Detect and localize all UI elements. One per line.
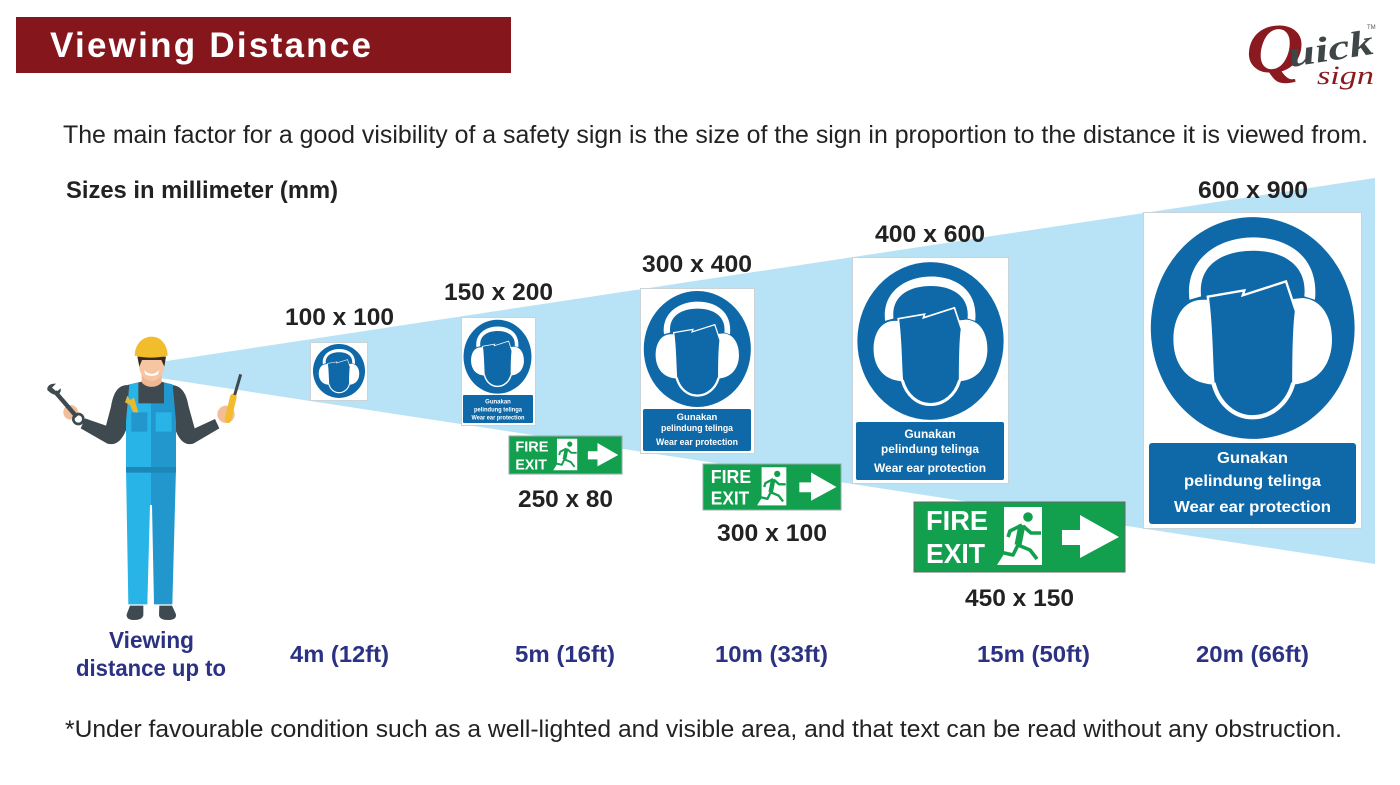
sign: fire exit 300 x 100: FIRE — [711, 466, 751, 487]
size labels: 450 x 150 — [965, 585, 1074, 612]
sign: fire exit 300 x 100: EXIT — [711, 488, 749, 509]
worker figure — [47, 337, 241, 620]
sign: ear protection 150 x 200: pelindung telinga — [474, 408, 523, 414]
size labels: 400 x 600 — [875, 221, 985, 248]
sign: fire exit 450 x 150: FIRE — [926, 505, 988, 536]
sign: ear protection 150 x 200 — [462, 318, 536, 426]
viewing distance labels: 10m (33ft) — [715, 641, 828, 667]
sign: ear protection 600 x 900: Gunakan — [1217, 450, 1288, 467]
sign: ear protection 300 x 400: pelindung telinga — [661, 423, 734, 434]
wrench and hand — [63, 405, 78, 420]
size labels: 250 x 80 — [518, 486, 613, 513]
sign: ear protection 600 x 900: pelindung telinga — [1184, 473, 1321, 490]
pocket spanner — [125, 396, 138, 412]
left arm — [81, 385, 128, 444]
viewing distance labels: Viewing — [109, 627, 194, 653]
intro text: The main factor for a good visibility of a safety sign is the size of the sign in proportion to the distance it is viewed from. — [63, 121, 1368, 149]
sign: ear protection 400 x 600 — [852, 258, 1008, 484]
size labels: 300 x 100 — [717, 520, 827, 547]
sign: fire exit 450 x 150 — [914, 502, 1125, 572]
sign: fire exit 300 x 100 — [703, 464, 841, 510]
screwdriver and hand — [217, 406, 235, 423]
sizes heading: Sizes in millimeter (mm) — [66, 177, 338, 204]
viewing distance labels: 5m (16ft) — [515, 641, 615, 667]
viewing distance labels: distance up to — [76, 655, 226, 681]
footnote: *Under favourable condition such as a well-lighted and visible area, and that text can be read without any obstruction. — [65, 716, 1342, 743]
size labels: 600 x 900 — [1198, 177, 1308, 204]
viewing distance labels: 4m (12ft) — [290, 641, 389, 667]
viewing distance labels: 15m (50ft) — [977, 641, 1090, 667]
viewing distance labels — [76, 627, 1309, 681]
size labels: 300 x 400 — [642, 251, 752, 278]
sign: ear protection 600 x 900: Wear ear protection — [1174, 499, 1331, 516]
sign: fire exit 250 x 80: EXIT — [515, 457, 548, 474]
size labels: 100 x 100 — [285, 304, 394, 331]
title banner: Viewing Distance — [50, 26, 371, 65]
logo: Quick sign: sign — [1317, 61, 1374, 90]
sign: ear protection 300 x 400: Gunakan — [677, 412, 718, 423]
sign: fire exit 250 x 80 — [509, 436, 622, 474]
sign: ear protection 150 x 200: Wear ear protection — [472, 416, 525, 422]
logo: Quick sign: Q — [1246, 10, 1304, 88]
sign: fire exit 450 x 150: EXIT — [926, 538, 985, 569]
logo: Quick sign: uick — [1285, 22, 1376, 75]
size labels — [285, 177, 1308, 612]
overalls — [126, 382, 151, 604]
sign: ear protection 400 x 600: Wear ear protection — [874, 461, 986, 475]
title banner — [16, 17, 511, 73]
size labels: 150 x 200 — [444, 279, 553, 306]
logo: Quick sign — [1246, 10, 1376, 90]
sign: ear protection 300 x 400 — [640, 288, 754, 454]
helmet — [135, 337, 168, 358]
sign: fire exit 250 x 80: FIRE — [515, 439, 548, 456]
right arm — [172, 385, 219, 444]
sign: ear protection 600 x 900 — [1144, 212, 1362, 528]
sign: ear protection 400 x 600: pelindung telinga — [881, 442, 979, 456]
boots — [127, 606, 143, 620]
sign: ear protection 300 x 400: Wear ear protection — [656, 437, 738, 448]
viewing distance labels: 20m (66ft) — [1196, 641, 1309, 667]
sign: ear protection 400 x 600: Gunakan — [904, 427, 956, 441]
torso — [125, 382, 173, 425]
sign: ear protection 100 x 100 — [310, 342, 368, 400]
sign: ear protection 150 x 200: Gunakan — [485, 400, 511, 406]
logo: Quick sign: TM — [1367, 25, 1376, 31]
neck and face — [142, 373, 162, 387]
light-blue viewing beam — [160, 178, 1375, 564]
